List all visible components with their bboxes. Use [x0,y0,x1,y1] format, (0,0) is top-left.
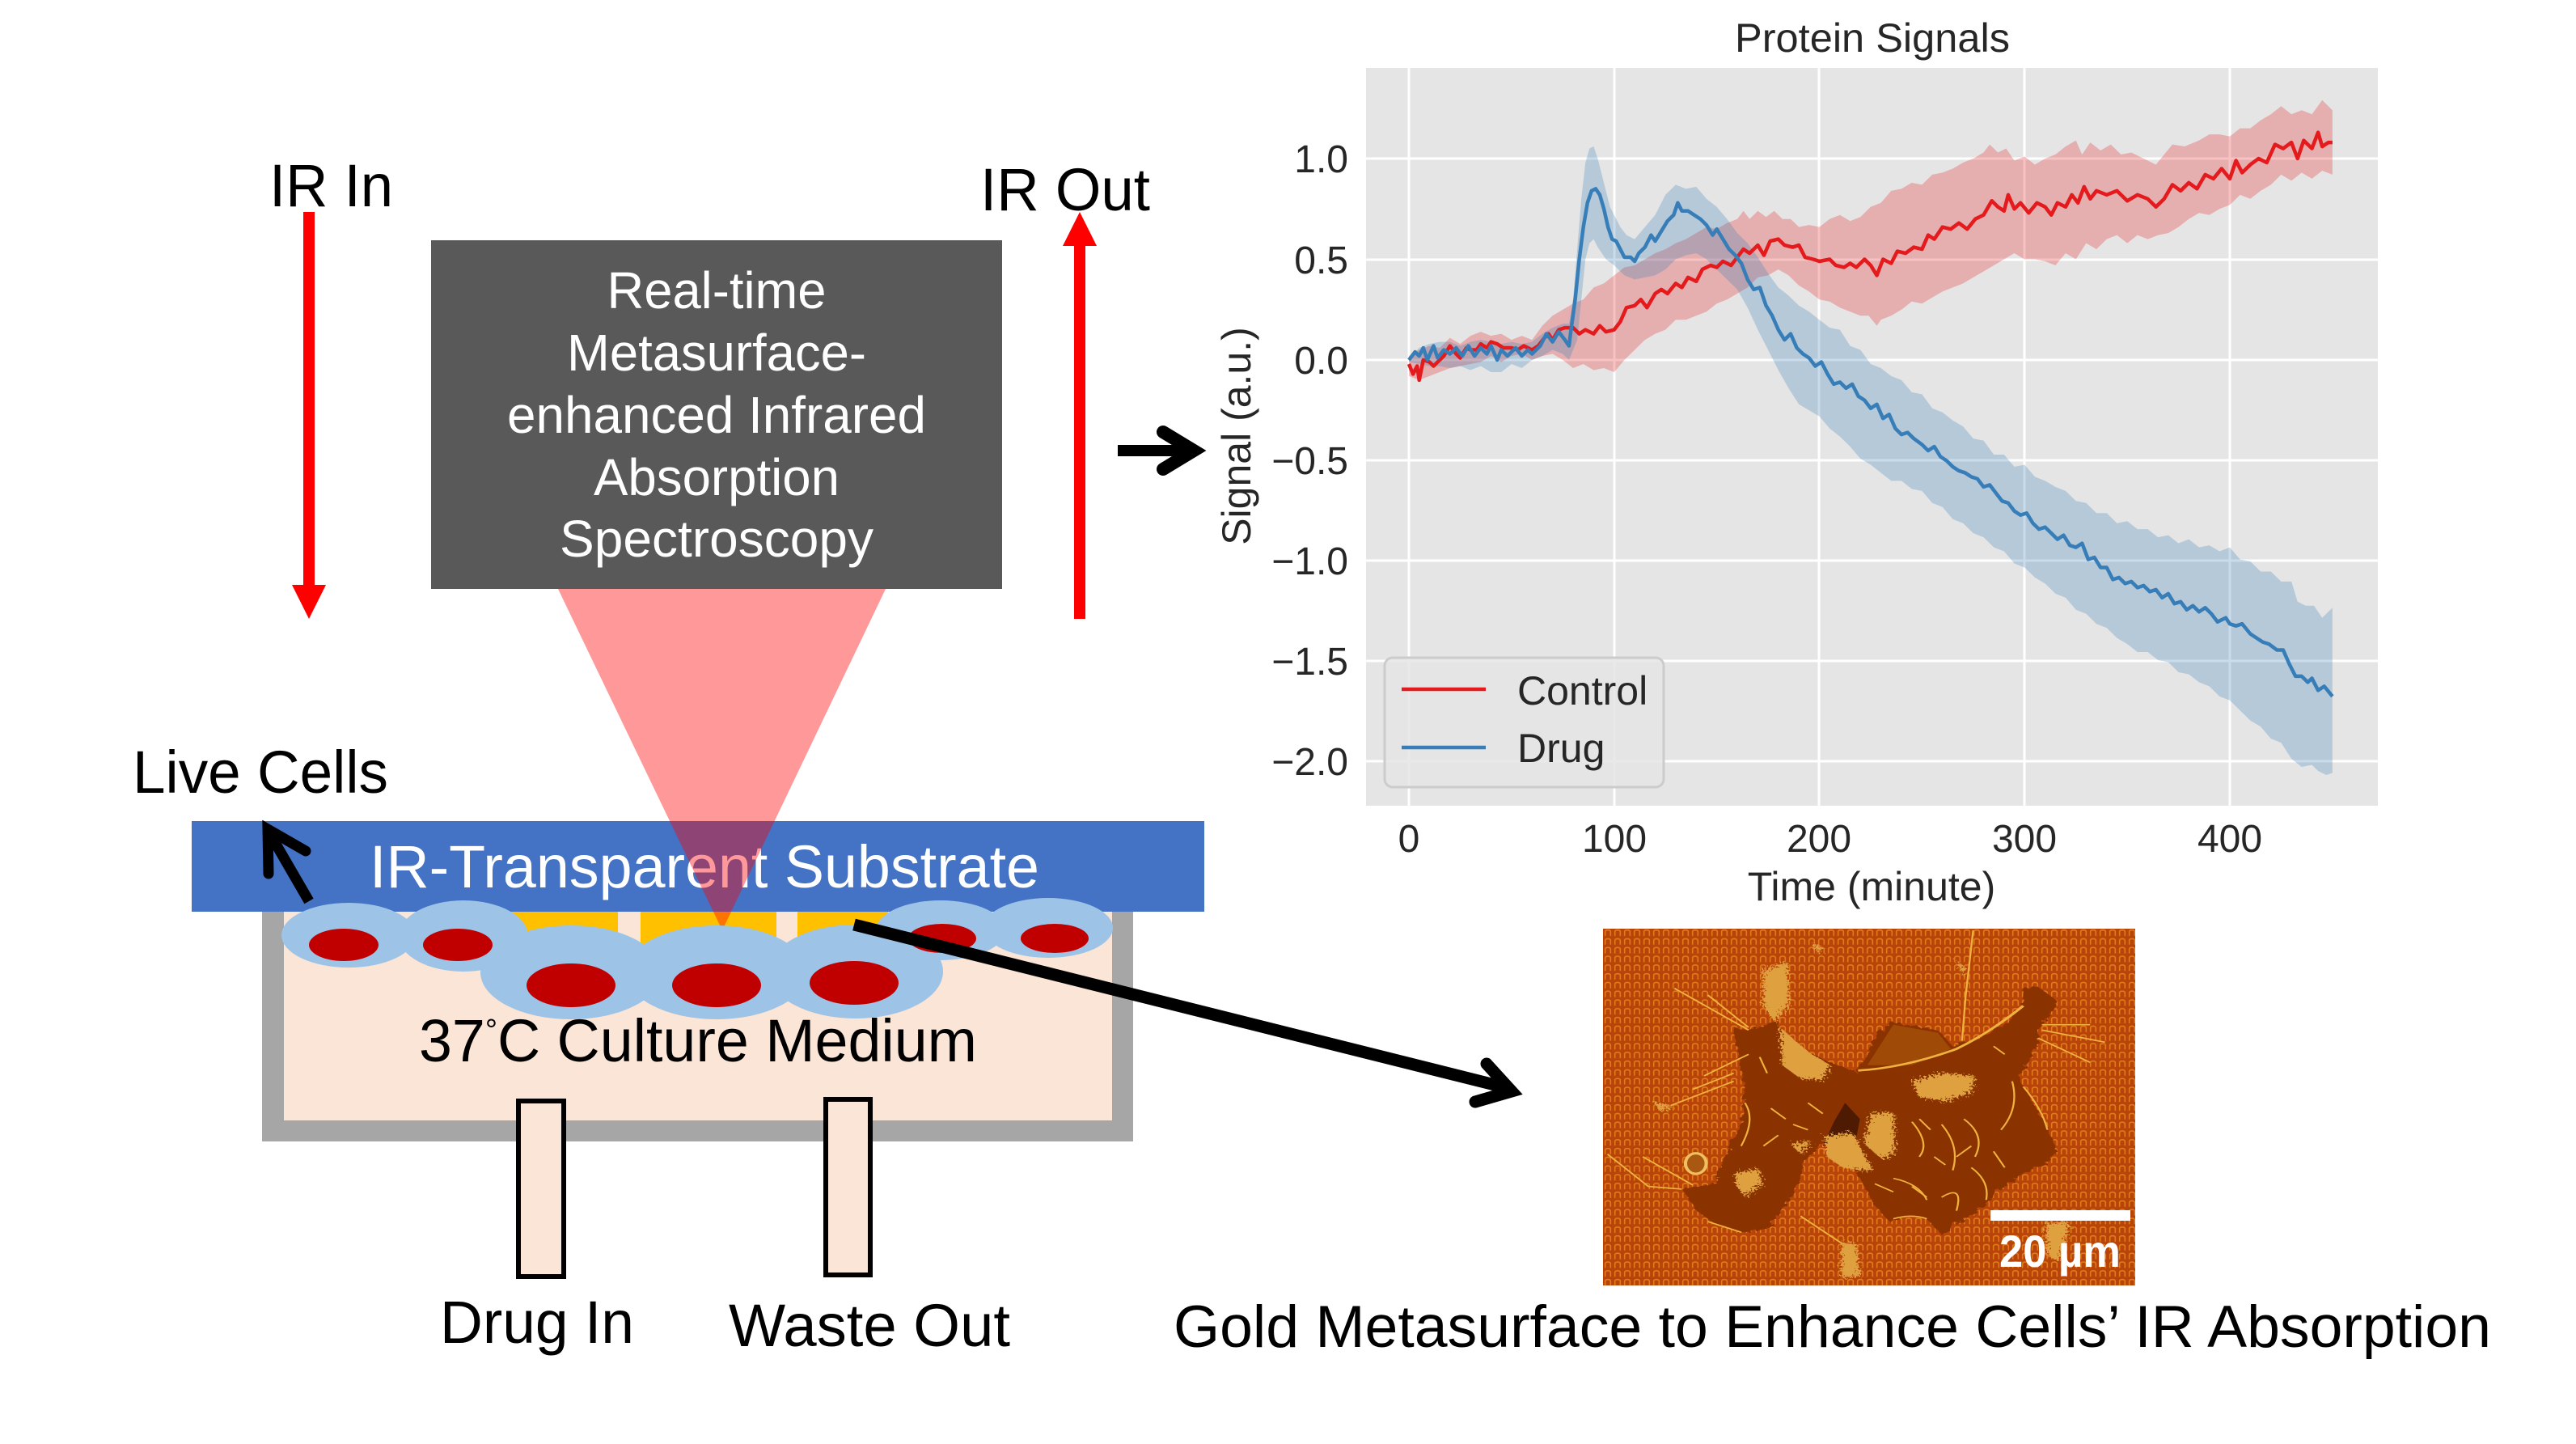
y-axis tick labels: 0.0 [1294,340,1348,383]
label: IR Out: IR Out [980,156,1150,223]
control band [1409,100,2333,380]
label: culture medium: 37 [419,1007,485,1074]
label: Waste Out: Waste Out [729,1292,1010,1359]
arrow: IR out (up) [1063,212,1097,619]
gold metasurface strips [510,912,888,948]
x-axis tick labels [1398,818,2262,861]
x-axis tick labels: 200 [1787,818,1851,861]
legend: Drug [1517,726,1605,771]
legend [1385,658,1664,787]
bright debris [1654,944,2070,1278]
gridlines [1366,68,2378,806]
arrow: to SEM image [854,925,1512,1102]
cell body [1608,930,2105,1278]
image: gold metasurface SEM with cell [1603,929,2135,1285]
legend: Control [1517,668,1648,714]
filaments and ridges [1608,930,2105,1243]
label: Drug In: Drug In [440,1289,634,1356]
x-axis tick labels: 300 [1992,818,2057,861]
y-axis tick labels: −1.5 [1271,641,1348,684]
scale bar [1990,1210,2130,1221]
vesicle [1686,1154,1707,1174]
control line [1409,133,2333,380]
label: image caption: Gold Metasurface to Enhance Cells’ IR Absorption [1174,1294,2491,1360]
data series [1409,100,2333,775]
chart title: Protein Signals [1735,15,2010,61]
x-axis tick labels: 400 [2197,818,2262,861]
y-axis tick labels: 1.0 [1294,138,1348,181]
panel: spectroscopy box: Real-time [607,261,827,320]
y-axis tick labels: −0.5 [1271,440,1348,483]
arrow: live cells pointer [268,829,309,901]
label: IR In: IR In [269,152,393,219]
live cells [281,898,1113,1019]
label: culture medium: ° [485,1014,497,1048]
chart: protein signals [1214,15,2378,909]
IR beam [558,589,886,930]
plot background [1366,68,2378,806]
arrow: to chart [1118,432,1194,469]
label: culture medium: C Culture Medium [497,1007,977,1074]
x-axis tick labels: 100 [1582,818,1647,861]
y-axis tick labels: −2.0 [1271,741,1348,784]
panel: IR-transparent substrate [192,821,1204,912]
tube: drug in [518,1101,564,1277]
panel: spectroscopy box: Spectroscopy [560,510,873,568]
panel: spectroscopy box [431,240,1002,589]
label: Live Cells: Live Cells [133,739,388,806]
x-axis title: Time (minute) [1748,864,1995,909]
tube: waste out [826,1099,870,1275]
y-axis tick labels: −1.0 [1271,540,1348,583]
y-axis tick labels: 0.5 [1294,239,1348,282]
drug band [1409,146,2333,775]
y-axis tick labels [1271,138,1348,784]
x-axis tick labels: 0 [1398,818,1419,861]
y-axis title: Signal (a.u.) [1214,327,1259,545]
label: IR-Transparent Substrate: IR-Transparent Substrate [370,833,1039,900]
arrow: IR in (down) [292,212,326,619]
panel: culture chamber [262,890,1133,1141]
panel: spectroscopy box: Metasurface- [567,324,866,382]
panel: spectroscopy box: Absorption [594,448,840,506]
scale label: 20 µm [1999,1226,2121,1277]
panel: spectroscopy box: enhanced Infrared [507,386,926,444]
drug line [1409,188,2333,697]
